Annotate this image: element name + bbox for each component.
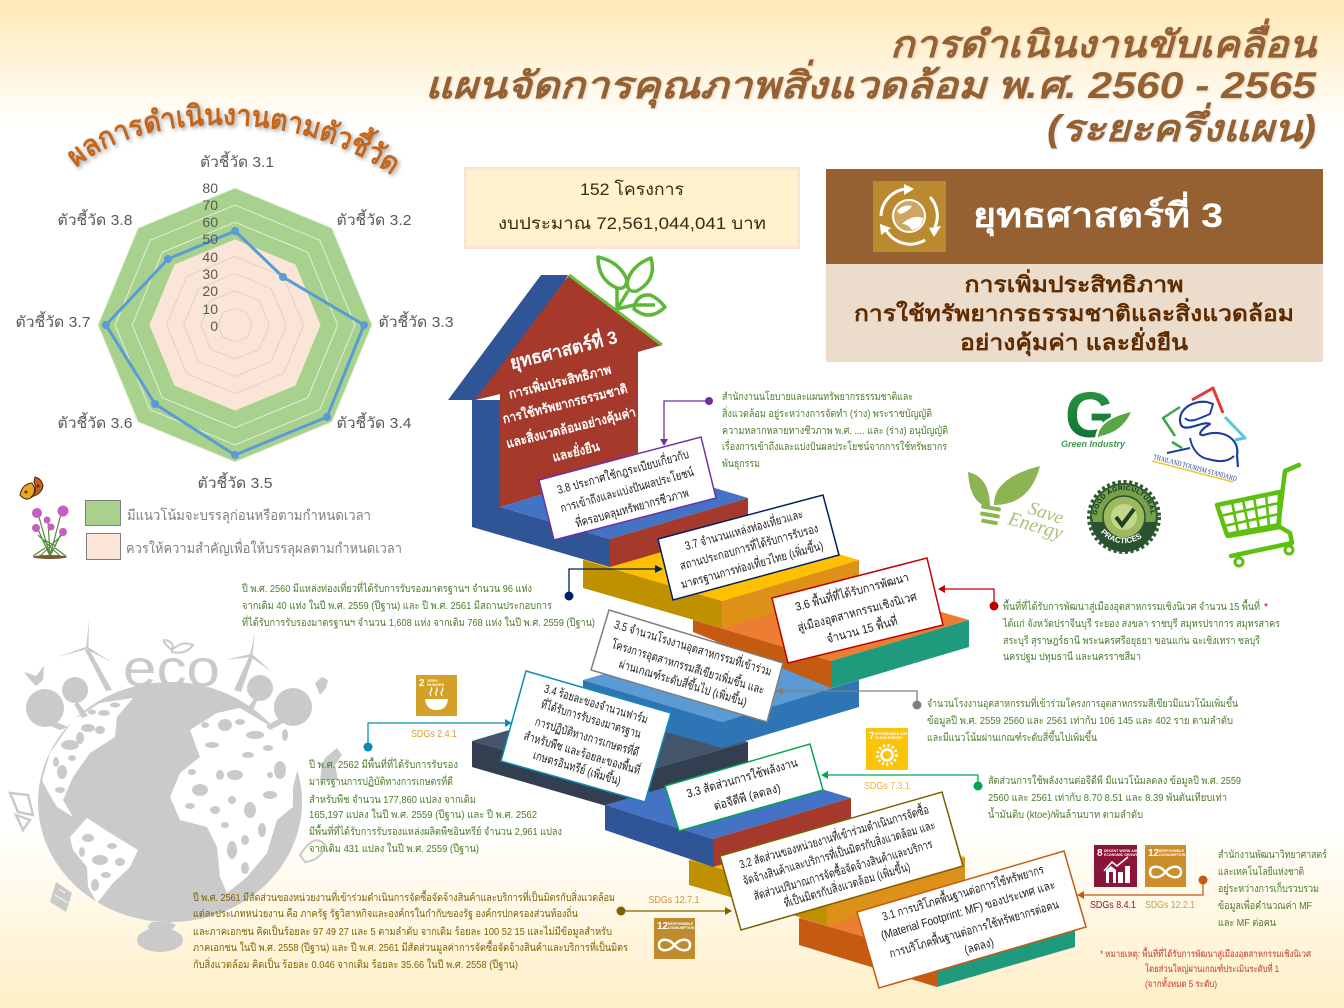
text: 3.6 status: นครปฐม ปทุมธานี และนครราชสีมา: [1003, 650, 1141, 663]
card: indicator 3.6: [772, 558, 943, 663]
connector: 3.1: [1077, 876, 1208, 899]
icon: SDG 12 second: [1145, 845, 1186, 887]
text: 3.5 status: [927, 696, 1238, 744]
panel: strategy 3 description: อย่างคุ้มค่า และยั่งยืน: [960, 326, 1188, 357]
card: indicator 3.1: (Material Footprint: MF) ของประเทศ และ: [879, 878, 1057, 942]
footnote: โดยส่วนใหญ่ผ่านเกณฑ์ประเมินระดับที่ 1: [1145, 962, 1279, 975]
card: indicator 3.8: ที่ครอบคลุมทรัพยากรชีวภาพ: [573, 484, 691, 531]
wind turbines: [58, 620, 272, 692]
radial axis numbers: 50: [202, 231, 218, 247]
text: 3.8 status: สิ่งแวดล้อม อยู่ระหว่างการจัดทำ (ร่าง) พระราชบัญญัติ: [722, 406, 932, 420]
text: 3.3 status: สัดส่วนการใช้พลังงานต่อจีดีพี มีแนวโน้มลดลง ข้อมูลปี พ.ศ. 2559: [988, 774, 1241, 787]
text: 3.2 status: [193, 890, 628, 971]
radial axis numbers: 70: [202, 197, 218, 213]
icon: SDG 8: [1094, 845, 1141, 887]
SDG 7.3.1 label: SDGs 7.3.1: [864, 780, 910, 792]
icon: butterfly: [20, 477, 43, 499]
text: 3.4 status: มาตรฐานการปฏิบัติทางการเกษตรที่ดี: [309, 774, 453, 788]
icon: recycling globe: [873, 181, 946, 252]
step: gold lower: [689, 817, 965, 925]
connector: 3.8: [660, 397, 713, 446]
text: 3.5 status: ข้อมูลปี พ.ศ. 2559 2560 และ 2561 เท่ากับ 106 145 และ 402 ราย ตามลำดับ: [927, 714, 1233, 727]
trees: [26, 689, 64, 727]
step: blue and red lower: [605, 765, 851, 867]
radial axis numbers: 30: [202, 266, 218, 282]
text: 3.7 status: [242, 581, 595, 629]
icon: SDG 2: HUNGER: [427, 682, 444, 687]
step: navy: [472, 700, 748, 807]
connector: 3.3: [821, 771, 982, 790]
indicator labels: ตัวชี้วัด 3.2: [336, 209, 412, 229]
card: indicator 3.6: สู่เมืองอุตสาหกรรมเชิงนิเวศ: [796, 589, 919, 636]
house text: การใช้ทรัพยากรธรรมชาติ: [501, 380, 629, 426]
card: indicator 3.1: (ลดลง): [963, 935, 995, 957]
card: indicator 3.1: [857, 851, 1086, 988]
icon: SDG 12 second: 12: [1148, 848, 1160, 859]
icon: SDG 7: [866, 728, 908, 770]
radial axis numbers: 60: [202, 214, 218, 230]
panel: strategy 3 description: [826, 264, 1323, 362]
curved heading: results by indicator: ผลการดำเนินงานตามตัวชี้วัด: [68, 102, 402, 178]
text: 3.4 status: ปี พ.ศ. 2562 มีพื้นที่ที่ได้รับการรับรอง: [309, 757, 458, 771]
icon: SDG 12 second: CONSUMPTION: [1159, 853, 1186, 857]
card: indicator 3.4: [501, 671, 671, 802]
title: การดำเนินงานขับเคลื่อน: [890, 18, 1318, 65]
logo: Thailand Tourism Standard: THAILAND TOURISM STANDARD: [1152, 452, 1238, 483]
card: indicator 3.3: ต่อจีดีพี (ลดลง): [712, 781, 782, 813]
indicator labels: ตัวชี้วัด 3.8: [58, 209, 132, 229]
staircase steps, bottom to top: [448, 257, 1075, 987]
info box: projects and budget: 152 โครงการ: [580, 179, 684, 199]
text: 3.3 status: น้ำมันดิบ (ktoe)/พันล้านบาท ตามลำดับ: [988, 807, 1143, 821]
text: 3.8 status: สำนักงานนโยบายและแผนทรัพยากรธรรมชาติและ: [722, 390, 913, 403]
text: 3.2 status: กับสิ่งแวดล้อม คิดเป็น ร้อยละ 0.046 จากเดิม ร้อยละ 35.66 ในปี พ.ศ. 2558 (ปีฐาน): [193, 957, 518, 971]
card: indicator 3.4: สำหรับพืช และร้อยละของพื้นที่: [522, 727, 643, 777]
card: indicator 3.4: ที่ได้รับการรับรองมาตรฐาน: [539, 695, 643, 741]
info box: projects and budget: [466, 168, 798, 248]
icon: plant on roof: [598, 257, 665, 315]
logo: Good Agricultural Practices seal: [1087, 480, 1161, 554]
connector: 3.5: [775, 687, 922, 710]
step: orange and teal upper: [693, 580, 969, 688]
text: 3.8 status: [722, 390, 948, 470]
title: (ระยะครึ่งแผน): [1047, 102, 1316, 149]
card: indicator 3.3: 3.3 สัดส่วนการใช้พลังงาน: [685, 755, 799, 801]
text: 3.1 status: สำนักงานพัฒนาวิทยาศาสตร์: [1218, 848, 1327, 861]
text: 3.2 status: แต่ละประเภทหน่วยงาน คือ ภาครัฐ รัฐวิสาหกิจและองค์กรในกำกับของรัฐ องค์กรปกครองส่วนท้องถิ่น: [193, 906, 578, 920]
text: 3.6 status: พื้นที่ที่ได้รับการพัฒนาสู่เมืองอุตสาหกรรมเชิงนิเวศ จำนวน 15 พื้นที่: [1003, 599, 1260, 613]
text: 3.3 status: 2560 และ 2561 เท่ากับ 8.70 8.51 และ 8.39 พันตันเทียบเท่า: [988, 791, 1227, 804]
panel: strategy 3 header: [826, 169, 1323, 264]
card: indicator 3.5: 3.5 จำนวนโรงงานอุตสาหกรรมที่เข้าร่วม: [612, 615, 774, 680]
logo: Green Industry: Green Industry: [1061, 439, 1126, 449]
connector: 3.7: [564, 565, 663, 600]
text: 3.6 status: [1002, 599, 1280, 663]
icon: flowers: [32, 506, 68, 559]
radial axis numbers: 80: [202, 180, 218, 196]
card: indicator 3.2: สัดส่วนปริมาณการจัดซื้อจัดจ้างสินค้าและบริการ: [751, 835, 935, 903]
card: indicator 3.2: จัดจ้างสินค้าและบริการที่เป็นมิตรกับสิ่งแวดล้อม และ: [741, 816, 937, 888]
logo: Save Energy: [968, 466, 1066, 544]
indicator labels: ตัวชี้วัด 3.1: [200, 151, 274, 171]
text: 3.1 status: ข้อมูลเพื่อคำนวณค่า MF: [1218, 898, 1312, 912]
text: 3.5 status: และมีแนวโน้มผ่านเกณฑ์ระดับสี่ขึ้นไปเพิ่มขึ้น: [927, 730, 1097, 744]
indicator labels: ตัวชี้วัด 3.6: [58, 412, 132, 432]
logo: Green Industry: G: [1065, 379, 1115, 451]
text: 3.7 status: จากเดิม 40 แห่ง ในปี พ.ศ. 2559 (ปีฐาน) และ ปี พ.ศ. 2561 มีสถานประกอบการ: [242, 599, 552, 612]
SDG 12.7.1 label: SDGs 12.7.1: [648, 894, 700, 906]
card: indicator 3.4: 3.4 ร้อยละของจำนวนฟาร์ม: [542, 682, 650, 726]
icon: SDG 7: 7: [869, 731, 875, 742]
radial axis numbers: 20: [202, 283, 218, 299]
card: indicator 3.7: [658, 495, 839, 600]
card: indicator 3.2: ที่เป็นมิตรกับสิ่งแวดล้อม (เพิ่มขึ้น): [782, 858, 912, 910]
text: 3.1 status: และ MF ต่อคน: [1218, 917, 1276, 929]
SDG 8.4.1 label: SDGs 8.4.1: [1090, 899, 1136, 911]
icon: SDG 12: 12: [657, 921, 669, 932]
house text: การเพิ่มประสิทธิภาพ: [507, 360, 613, 402]
text: 3.1 status: อยู่ระหว่างการเก็บรวบรวม: [1218, 881, 1319, 895]
text: 3.3 status: [988, 774, 1241, 821]
text: 3.4 status: จากเดิม 431 แปลง ในปี พ.ศ. 2559 (ปีฐาน): [309, 842, 479, 855]
radial axis numbers: [202, 180, 218, 334]
text: 3.8 status: เรื่องการเข้าถึงและแบ่งปันผลประโยชน์จากการใช้ทรัพยากร: [722, 439, 947, 453]
icon: SDG 7: AFFORDABLE AND: [875, 732, 908, 736]
eco word: eco: [123, 640, 220, 698]
icon: SDG 2: [416, 675, 457, 716]
house text: ยุทธศาสตร์ที่ 3: [507, 324, 620, 375]
icon: SDG 8: 8: [1097, 848, 1103, 859]
radial axis numbers: 40: [202, 249, 218, 265]
house text: และสิ่งแวดล้อมอย่างคุ้มค่า: [504, 402, 637, 452]
title: แผนจัดการคุณภาพสิ่งแวดล้อม พ.ศ. 2560 - 2565: [425, 59, 1318, 109]
text: 3.8 status: ความหลากหลายทางชีวภาพ พ.ศ. .... และ (ร่าง) อนุบัญญัติ: [722, 424, 948, 437]
text: 3.7 status: ปี พ.ศ. 2560 มีแหล่งท่องเที่ยวที่ได้รับการรับรองมาตรฐานฯ จำนวน 96 แห่ง: [242, 581, 532, 595]
card: indicator 3.1: 3.1 การบริโภคพื้นฐานต่อการใช้ทรัพยากร: [880, 860, 1046, 924]
text: 3.4 status: 165,197 แปลง ในปี พ.ศ. 2559 (ปีฐาน) และ ปี พ.ศ. 2562: [309, 808, 537, 821]
card: indicator 3.6: จำนวน 15 พื้นที่: [824, 612, 899, 646]
text: 3.2 status: ปี พ.ศ. 2561 มีสัดส่วนของหน่วยงานที่เข้าร่วมดำเนินการจัดซื้อจัดจ้างสินค้าและบริการที่เป็นมิตรกับสิ่งแวดล้อม: [193, 890, 615, 904]
card: indicator 3.8: 3.8 ประกาศใช้กฎระเบียบเกี่ยวกับ: [555, 445, 690, 497]
panel: strategy 3 description: การเพิ่มประสิทธิภาพ: [964, 268, 1184, 297]
card: indicator 3.3: [665, 744, 823, 831]
connector: 3.2: [616, 906, 732, 916]
step: orange and teal bottom: [799, 875, 1075, 987]
panel: strategy 3 header: ยุทธศาสตร์ที่ 3: [973, 191, 1223, 237]
logo: Good Agricultural Practices seal: PRACTICES: [1100, 528, 1142, 544]
card: indicator 3.7: มาตรฐานการท่องเที่ยวไทย (เพิ่มขึ้น): [679, 537, 825, 591]
text: 3.4 status: มีพื้นที่ที่ได้รับการรับรองแหล่งผลิตพืชอินทรีย์ จำนวน 2,961 แปลง: [309, 824, 562, 838]
title: [425, 18, 1318, 149]
icon: SDG 2: 2: [419, 678, 425, 689]
card: indicator 3.2: 3.2 สัดส่วนของหน่วยงานที่เข้าร่วมดำเนินการจัดซื้อ: [737, 800, 930, 872]
icon: SDG 12 second: RESPONSIBLE: [1159, 849, 1185, 853]
legend: มีแนวโน้มจะบรรลุก่อนหรือตามกำหนดเวลา: [127, 507, 371, 524]
icon: SDG 7: CLEAN ENERGY: [875, 736, 903, 740]
card: indicator 3.1: การบริโภคพื้นฐานต่อการใช้ทรัพยากรต่อคน: [887, 895, 1060, 961]
card: indicator 3.5: [591, 610, 783, 722]
text: 3.6 status: สระบุรี สุราษฎร์ธานี พระนครศรีอยุธยา ขอนแก่น ฉะเชิงเทรา ชลบุรี: [1003, 634, 1260, 647]
card: indicator 3.8: [539, 437, 716, 540]
text: 3.5 status: จำนวนโรงงานอุตสาหกรรมที่เข้าร่วมโครงการอุตสาหกรรมสีเขียวมีแนวโน้มเพิ่มขึ้น: [927, 696, 1238, 710]
text: 3.1 status: [1218, 848, 1327, 929]
footnote: [1100, 947, 1311, 990]
step: blue middle: [583, 640, 859, 748]
text: 3.4 status: สำหรับพืช จำนวน 177,860 แปลง จากเดิม: [309, 793, 476, 806]
connector: 3.4: [364, 719, 512, 752]
logo: Good Agricultural Practices seal: GOOD AGRICULTURAL: [1092, 486, 1155, 514]
icon: SDG 12: RESPONSIBLE: [668, 922, 694, 926]
logo: Save Energy: Energy: [1005, 507, 1066, 544]
decoration: eco globe: [10, 620, 342, 952]
radial axis numbers: 10: [202, 301, 218, 317]
icon: shopping cart: [1217, 465, 1299, 566]
text: 3.1 status: และเทคโนโลยีแห่งชาติ: [1218, 865, 1304, 878]
text: 3.2 status: และภาคเอกชน คิดเป็นร้อยละ 97 49 27 และ 5 ตามลำดับ จากเดิม ร้อยละ 100 52 15 และไม่มีข้อมูลสำหรับ: [193, 924, 612, 938]
card: indicator 3.6: 3.6 พื้นที่ที่ได้รับการพัฒนา: [793, 568, 910, 614]
card: indicator 3.7: 3.7 จำนวนแหล่งท่องเที่ยวและ: [683, 505, 805, 553]
SDG 12.2.1 label: SDGs 12.2.1: [1145, 899, 1195, 911]
connector: 3.6: [938, 585, 998, 610]
text: 3.2 status: ภาคเอกชน ในปี พ.ศ. 2558 (ปีฐาน) และ ปี พ.ศ. 2561 มีสัดส่วนมูลค่าการจัดซื้อจัดจ้างสินค้าและบริการที่เป็นมิตร: [193, 940, 628, 954]
text: 3.7 status: ที่ได้รับการรับรองมาตรฐานฯ จำนวน 1,608 แห่ง จากเดิม 768 แห่ง ในปี พ.ศ. 2559 (ปีฐาน): [242, 615, 595, 629]
icon: SDG 8: ECONOMIC GROWTH: [1104, 853, 1141, 857]
radial axis numbers: 0: [210, 318, 218, 334]
house arrow: [448, 275, 748, 567]
card: indicator 3.4: เกษตรอินทรีย์ (เพิ่มขึ้น): [531, 746, 623, 788]
card: indicator 3.8: การเข้าถึงและแบ่งปันผลประโยชน์: [559, 465, 695, 515]
icon: SDG 12: CONSUMPTION: [668, 926, 695, 930]
legend: [86, 500, 402, 560]
icon: SDG 8: DECENT WORK AND: [1104, 849, 1139, 853]
indicator labels: ตัวชี้วัด 3.4: [336, 412, 412, 432]
icon: SDG 2: ZERO: [427, 678, 438, 683]
text: 3.6 status: ได้แก่ จังหวัดปราจีนบุรี ระยอง สงขลา ราชบุรี สมุทรปราการ สมุทรสาคร: [1002, 617, 1280, 630]
card: indicator 3.5: ผ่านเกณฑ์ระดับสี่ขึ้นไป (เพิ่มขึ้น): [617, 655, 749, 709]
card: indicator 3.5: โครงการอุตสาหกรรมสีเขียวเพิ่มขึ้น และ: [610, 635, 767, 698]
info box: projects and budget: งบประมาณ 72,561,044,041 บาท: [498, 214, 766, 233]
text: 3.6 status: *: [1264, 601, 1268, 613]
legend: ควรให้ความสำคัญเพื่อให้บรรลุผลตามกำหนดเวลา: [126, 539, 402, 557]
step: gold upper: [583, 520, 859, 628]
house text: [501, 324, 637, 465]
panel: strategy 3 description: การใช้ทรัพยากรธรรมชาติและสิ่งแวดล้อม: [854, 297, 1294, 326]
indicator labels: ตัวชี้วัด 3.7: [16, 311, 90, 331]
radar chart: [16, 151, 454, 492]
icon: SDG 12: [654, 918, 695, 959]
card: indicator 3.4: การปฏิบัติทางการเกษตรที่ดี: [533, 713, 641, 759]
indicator labels: ตัวชี้วัด 3.5: [198, 472, 272, 492]
logo: Thailand Tourism Standard: [1152, 388, 1245, 483]
SDG 2.4.1 label: SDGs 2.4.1: [411, 728, 457, 740]
text: 3.8 status: พันธุกรรม: [722, 458, 760, 470]
house text: และยั่งยืน: [550, 437, 601, 465]
card: indicator 3.7: สถานประกอบการที่ได้รับการรับรอง: [678, 519, 820, 573]
footnote: (จากทั้งหมด 5 ระดับ): [1145, 977, 1217, 990]
logo: Save Energy: Save: [1025, 498, 1066, 529]
card: indicator 3.2: [720, 792, 963, 930]
indicator labels: ตัวชี้วัด 3.3: [378, 311, 454, 331]
text: 3.4 status: [309, 757, 562, 855]
data series line: [102, 227, 368, 459]
indicator labels: [16, 151, 454, 492]
